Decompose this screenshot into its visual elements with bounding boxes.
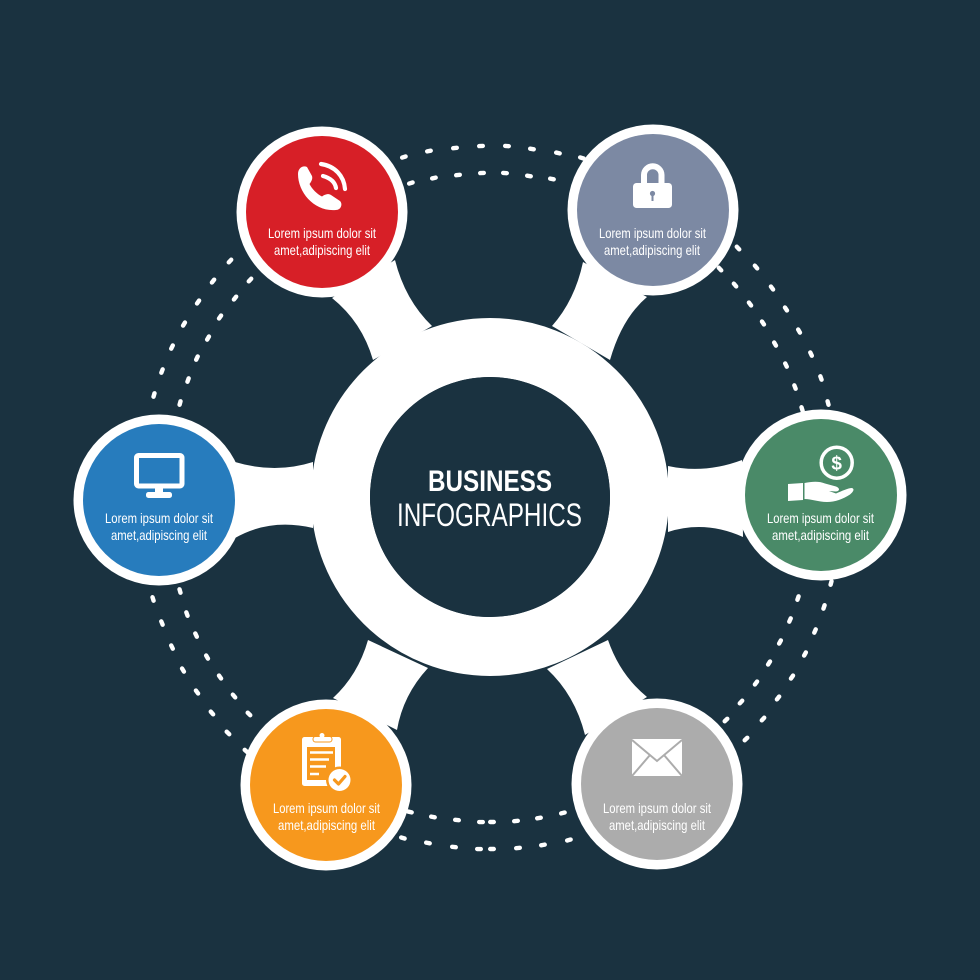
text: money panel [767,510,874,543]
panel: monitor (blue) [74,414,244,586]
center title [370,377,610,617]
dashed rings [152,146,832,849]
text: phone panel: Lorem ipsum dolor sit [268,225,376,241]
icon: padlock [633,166,672,208]
text: money panel: Lorem ipsum dolor sit [767,510,874,526]
white hub with connectors [235,260,743,735]
text: lock panel: amet,adipiscing elit [604,242,700,258]
panel: lock (blue-gray) [568,124,738,296]
icon: envelope [632,739,682,776]
text: clipboard panel: Lorem ipsum dolor sit [273,800,380,816]
text: monitor panel [105,510,213,543]
text: phone panel: amet,adipiscing elit [274,242,370,258]
panel: clipboard (orange) [240,700,412,870]
icon: phone [298,164,345,210]
text: monitor panel: amet,adipiscing elit [111,527,207,543]
panel: money (green) [736,410,906,580]
icon: clipboard with check [302,733,353,794]
text: money panel: amet,adipiscing elit [772,527,869,543]
panel: phone (red) [236,126,408,298]
text: phone panel [268,225,376,258]
center title: INFOGRAPHICS [397,497,582,533]
text: lock panel [599,225,706,258]
text: lock panel: Lorem ipsum dolor sit [599,225,706,241]
center title: BUSINESS [428,465,552,498]
text: mail panel: Lorem ipsum dolor sit [603,800,711,816]
icon: monitor [136,456,182,498]
panel: mail (gray) [572,698,742,870]
icon: hand with coin [788,447,853,502]
text: clipboard panel [273,800,380,833]
icon: hand with coin: $ [831,454,842,474]
text: monitor panel: Lorem ipsum dolor sit [105,510,213,526]
text: mail panel: amet,adipiscing elit [609,817,705,833]
text: clipboard panel: amet,adipiscing elit [278,817,375,833]
text: mail panel [603,800,711,833]
